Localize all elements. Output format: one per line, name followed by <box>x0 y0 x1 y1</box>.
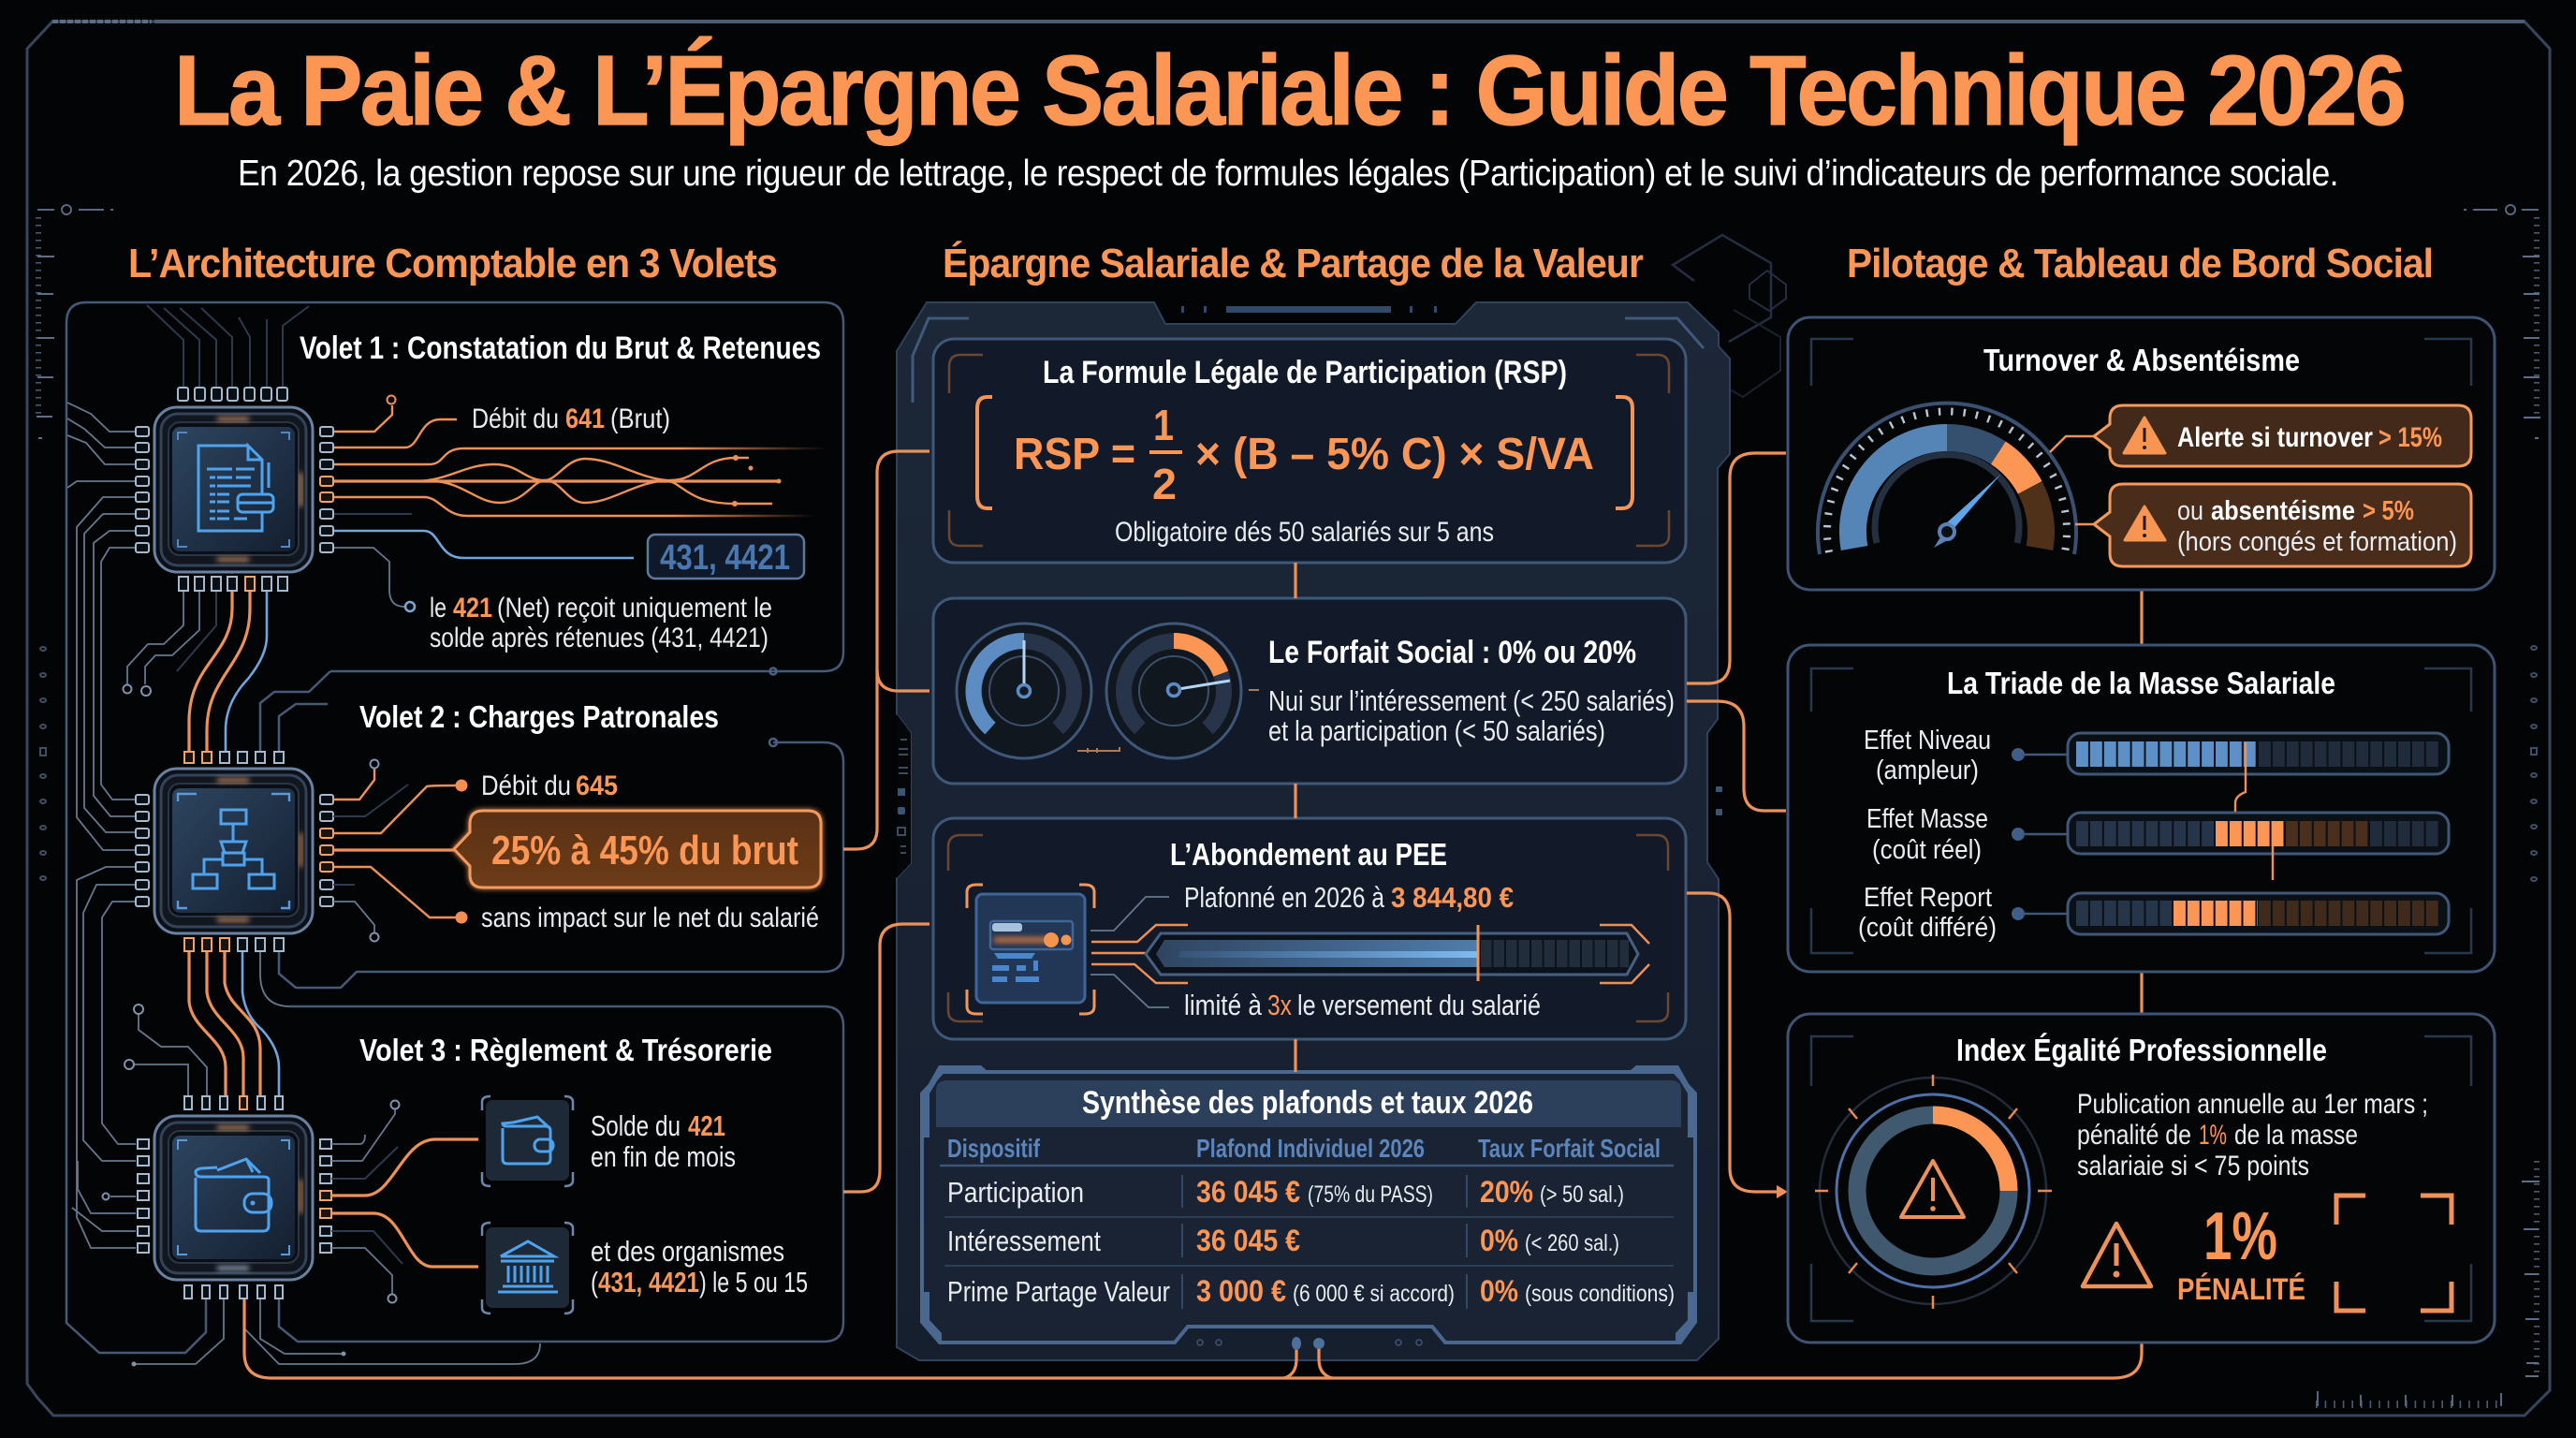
heading: turnover: Turnover & Absentéisme <box>1983 343 2300 377</box>
row: prime partage valeur: (6 000 € si accord) <box>1293 1281 1455 1307</box>
formula: 1 <box>1153 401 1174 449</box>
subtitle: En 2026, la gestion repose sur une rigueur de lettrage, le respect de formules légales (Participation) et le suivi d’indicateurs de performance sociale. <box>238 154 2338 194</box>
orange links between columns <box>843 451 2142 1198</box>
viewfinder brackets <box>2336 1196 2452 1311</box>
icon card: wallet <box>482 1096 573 1186</box>
column labels: Plafond Individuel 2026 <box>1196 1134 1425 1163</box>
row: intéressement: Intéressement <box>947 1225 1101 1257</box>
hexagon decoration <box>1673 235 1786 397</box>
panel: index égalité <box>1788 1014 2495 1343</box>
volet 3 outputs <box>331 1096 808 1313</box>
alert: turnover <box>2050 405 2471 466</box>
row: effet report: (coût différé) <box>1858 913 1997 943</box>
text: organismes: ( <box>591 1266 599 1299</box>
text: solde du 421 <box>591 1109 736 1173</box>
panel outlines <box>66 302 843 1353</box>
column heading: architecture: L’Architecture Comptable en 3 Volets <box>128 241 777 286</box>
row: participation <box>947 1175 1624 1209</box>
text: limité à 3x: limité à <box>1184 989 1263 1021</box>
formula: 2 <box>1152 460 1177 508</box>
chip 1 <box>136 388 333 591</box>
gauge: 20% <box>1106 624 1241 758</box>
right frame ruler <box>2316 205 2540 1406</box>
text: le 421 net <box>430 593 772 653</box>
alert: turnover: Alerte si turnover <box>2177 422 2373 453</box>
alert: absentéisme <box>2075 484 2471 566</box>
text: débit du 641: Débit du <box>472 404 559 434</box>
icon: warning <box>2125 506 2165 540</box>
text: débit du 641: (Brut) <box>610 404 670 434</box>
centre column housing <box>897 302 1730 1378</box>
icon: savings card <box>967 885 1094 1014</box>
heading: volet 1: Volet 1 : Constatation du Brut & Retenues <box>300 330 821 366</box>
text: publication <box>2077 1089 2428 1181</box>
gauge lines <box>1090 897 1649 1007</box>
text: conditions: et la participation (< 50 salariés) <box>1268 714 1605 747</box>
text: sans impact: sans impact sur le net du salarié <box>481 902 819 933</box>
text: publication: de la masse <box>2234 1120 2358 1151</box>
text: plafonné: Plafonné en 2026 à <box>1184 881 1385 914</box>
volet 1 outputs <box>333 395 827 653</box>
text: limité à 3x <box>1184 989 1541 1021</box>
row: effet niveau <box>1864 726 2449 785</box>
alert: absentéisme: absentéisme <box>2211 496 2355 526</box>
row: participation: (75% du PASS) <box>1308 1181 1433 1208</box>
row: prime partage valeur: 0% <box>1480 1274 1518 1308</box>
panel: turnover & absentéisme <box>1788 317 2495 590</box>
column labels: Dispositif <box>947 1134 1041 1163</box>
row: effet report <box>1858 883 2449 943</box>
alert: absentéisme: (hors congés et formation) <box>2177 527 2457 557</box>
text: débit du 645: 645 <box>576 770 618 801</box>
chip 2 <box>136 752 333 951</box>
formula brackets <box>977 397 1632 508</box>
icon card: bank <box>482 1223 573 1313</box>
text: débit du 645: Débit du <box>481 770 571 801</box>
text: le 421 net: solde après rétenues (431, 4421) <box>430 623 768 653</box>
row: intéressement <box>947 1224 1619 1257</box>
left column: three volets <box>66 302 2142 1378</box>
text: organismes: et des organismes <box>591 1235 784 1268</box>
icon: warning <box>2124 418 2165 453</box>
formula <box>1014 401 1594 508</box>
gauge: 0% <box>957 624 1091 758</box>
heading: volet 3: Volet 3 : Règlement & Trésorerie <box>359 1033 772 1067</box>
text: limité à 3x: 3x <box>1267 989 1292 1021</box>
callout: 25% à 45% du brut <box>454 811 821 888</box>
text: organismes: ) le 5 ou 15 <box>699 1266 808 1299</box>
penalty figure: PÉNALITÉ <box>2177 1272 2305 1306</box>
row: participation: 20% <box>1480 1175 1533 1209</box>
row: intéressement: 0% <box>1480 1224 1518 1257</box>
alert: absentéisme: > 5% <box>2363 496 2414 526</box>
table title: Synthèse des plafonds et taux 2026 <box>1082 1085 1533 1121</box>
table header band <box>936 1080 1681 1127</box>
column heading: épargne: Épargne Salariale & Partage de la Valeur <box>943 240 1644 286</box>
heading: triade: La Triade de la Masse Salariale <box>1947 666 2335 700</box>
row: effet niveau: Effet Niveau <box>1864 726 1991 756</box>
progress bar <box>1146 925 1638 981</box>
circuit traces <box>67 305 2142 1378</box>
text: organismes <box>591 1235 808 1299</box>
row: intéressement: 36 045 € <box>1196 1224 1300 1257</box>
note: obligatoire: Obligatoire dés 50 salariés sur 5 ans <box>1115 517 1494 548</box>
formula: RSP = <box>1014 430 1135 479</box>
row: effet masse: (coût réel) <box>1872 835 1982 865</box>
text: plafonné: 3 844,80 € <box>1391 881 1514 914</box>
penalty figure <box>2177 1199 2305 1306</box>
title: La Paie & L’Épargne Salariale : Guide Technique 2026 <box>174 36 2404 146</box>
text: le 421 net: (Net) reçoit uniquement le <box>497 593 772 624</box>
row: participation: 36 045 € <box>1196 1175 1300 1209</box>
text: solde du 421: Solde du <box>591 1109 681 1142</box>
row: prime partage valeur <box>947 1274 1675 1308</box>
heading: volet 2: Volet 2 : Charges Patronales <box>359 699 719 734</box>
panel: forfait social <box>933 598 1686 784</box>
row: effet niveau: (ampleur) <box>1876 756 1979 785</box>
row: effet masse <box>1866 804 2449 865</box>
chip 3 <box>138 1096 331 1299</box>
panel: triade masse salariale <box>1788 645 2495 972</box>
text: publication: pénalité de <box>2077 1120 2191 1151</box>
row: effet masse: Effet Masse <box>1866 804 1988 834</box>
left frame ruler <box>37 205 113 880</box>
centre connectors <box>1284 563 1332 1378</box>
callout: 25% à 45% du brut: 25% à 45% du brut <box>491 828 798 873</box>
text: le 421 net: 421 <box>453 593 492 624</box>
text: limité à 3x: le versement du salarié <box>1297 989 1541 1021</box>
text: débit du 641 <box>472 404 670 434</box>
text: solde du 421: en fin de mois <box>591 1140 736 1173</box>
panel: abondement PEE <box>933 818 1686 1039</box>
row: prime partage valeur: 3 000 € <box>1196 1274 1286 1308</box>
text: publication: 1% <box>2199 1120 2227 1151</box>
badge: 431, 4421: 431, 4421 <box>660 538 790 578</box>
text: le 421 net: le <box>430 593 446 624</box>
row: participation: Participation <box>947 1176 1084 1209</box>
text: solde du 421: 421 <box>688 1109 725 1142</box>
icon: warning large <box>2083 1224 2151 1286</box>
penalty figure: 1% <box>2203 1199 2277 1274</box>
row: prime partage valeur: (sous conditions) <box>1525 1281 1675 1307</box>
alert: absentéisme: ou <box>2177 496 2203 526</box>
alert: turnover: > 15% <box>2378 422 2442 453</box>
row: prime partage valeur: Prime Partage Valeur <box>947 1275 1170 1308</box>
formula: × (B – 5% C) × S/VA <box>1195 430 1594 479</box>
gauge: turnover <box>1818 404 2076 554</box>
text: conditions <box>1268 684 1675 747</box>
text: débit du 641: 641 <box>565 404 605 434</box>
column labels <box>947 1134 1661 1163</box>
text: forfait social: Le Forfait Social : 0% ou 20% <box>1268 635 1636 670</box>
column labels: Taux Forfait Social <box>1478 1134 1661 1163</box>
text: conditions: Nui sur l’intéressement (< 250 salariés) <box>1268 684 1675 717</box>
column heading: pilotage: Pilotage & Tableau de Bord Social <box>1847 241 2433 286</box>
heading: formule: La Formule Légale de Participation (RSP) <box>1043 355 1567 390</box>
text: publication: salariaie si < 75 points <box>2077 1151 2309 1181</box>
heading: index: Index Égalité Professionnelle <box>1956 1033 2327 1067</box>
table: synthèse <box>922 1065 1695 1343</box>
row: intéressement: (< 260 sal.) <box>1525 1230 1619 1256</box>
row: effet report: Effet Report <box>1864 883 1992 913</box>
text: publication: Publication annuelle au 1er mars ; <box>2077 1089 2428 1120</box>
panel: formule RSP <box>933 339 1686 563</box>
row: participation: (> 50 sal.) <box>1540 1181 1624 1208</box>
text: organismes: 431, 4421 <box>598 1266 699 1299</box>
volet 2 outputs <box>333 760 821 942</box>
icon: warning <box>1901 1161 1964 1217</box>
donut gauge <box>1815 1075 2052 1309</box>
heading: abondement: L’Abondement au PEE <box>1170 837 1447 872</box>
